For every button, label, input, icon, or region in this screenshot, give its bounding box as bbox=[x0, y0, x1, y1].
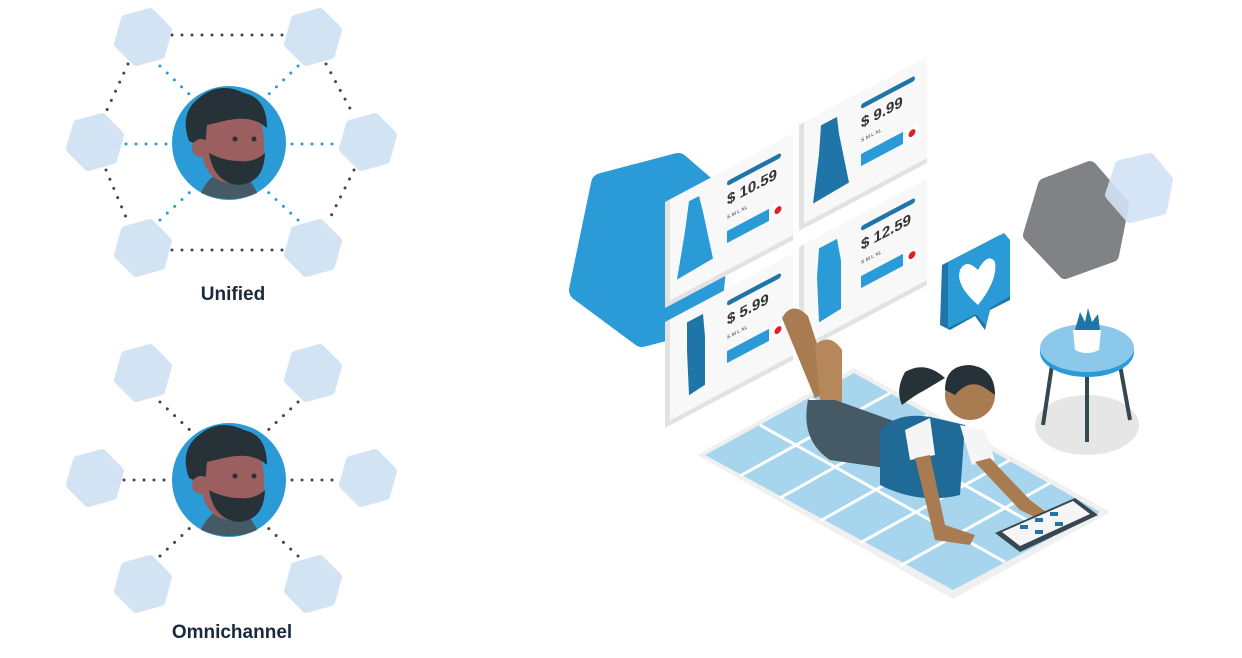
product card: $10.59: $ 10.59 bbox=[727, 166, 777, 209]
product card: $5.99 bbox=[665, 254, 793, 428]
background blue hexagon bbox=[580, 164, 722, 336]
product card: $12.59: S M L XL bbox=[861, 250, 881, 266]
avatar: customer bbox=[172, 86, 286, 200]
illustration: online shopping bbox=[580, 57, 1168, 599]
tablet bbox=[995, 498, 1098, 552]
product card: $9.99: S M L XL bbox=[861, 128, 881, 144]
product card: $12.59 bbox=[799, 179, 927, 353]
hexagon nodes bbox=[70, 12, 393, 273]
diagram: omnichannel bbox=[70, 348, 393, 643]
connector lines: unified radial bbox=[126, 66, 334, 220]
gray hexagon bbox=[1030, 168, 1122, 272]
diagram: unified bbox=[70, 12, 393, 305]
side table with plant bbox=[1035, 308, 1139, 455]
icon: heart speech bubble bbox=[940, 233, 1010, 330]
woman lying on rug bbox=[782, 308, 1050, 545]
hexagon nodes bbox=[70, 348, 393, 609]
product card: $9.99: $ 9.99 bbox=[861, 94, 903, 132]
label: Omnichannel: Omnichannel bbox=[172, 622, 292, 643]
product card: $12.59: $ 12.59 bbox=[861, 211, 911, 254]
label: Unified: Unified bbox=[201, 284, 265, 305]
product card: $5.99: S M L XL bbox=[727, 325, 747, 341]
light hexagon bbox=[1110, 158, 1168, 218]
product card: $10.59: S M L XL bbox=[727, 205, 747, 221]
rug bbox=[697, 368, 1110, 599]
avatar: customer bbox=[172, 423, 286, 537]
product card: $9.99 bbox=[799, 57, 927, 231]
product card: $10.59 bbox=[665, 134, 793, 308]
connector lines: unified ring bbox=[106, 35, 354, 250]
connector lines: omnichannel bbox=[124, 402, 336, 556]
product card: $5.99: $ 5.99 bbox=[727, 291, 769, 329]
